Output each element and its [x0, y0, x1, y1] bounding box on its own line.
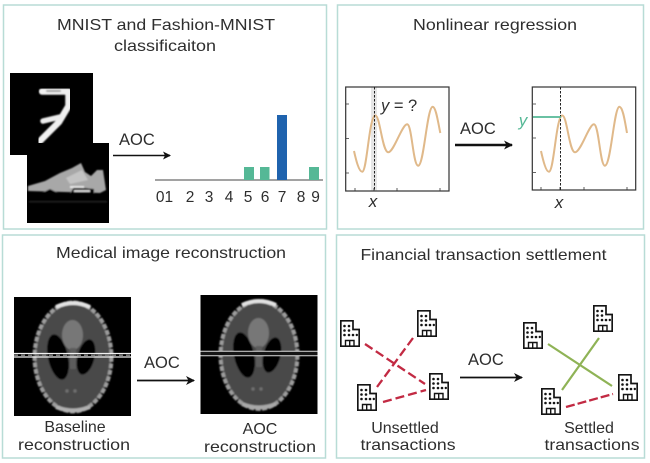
axis labels: digits: 5 [244, 189, 252, 206]
heading: financial transaction settlement: Financial transaction settlement [360, 247, 607, 264]
axis labels: digits: 01 [156, 189, 173, 206]
axis labels: digits: 3 [205, 189, 213, 206]
icon: building [418, 311, 436, 336]
image: baseline phantom [14, 297, 131, 416]
network: settled transactions [524, 306, 637, 414]
caption: settled transactions: Settled [564, 420, 614, 437]
caption: settled transactions: transactions [544, 437, 640, 454]
label: y: y [518, 111, 529, 130]
caption: AOC reconstruction: reconstruction [204, 439, 316, 456]
label: x: x [554, 193, 564, 212]
network: unsettled transactions [341, 311, 448, 410]
icon: building [542, 389, 560, 414]
panel: nonlinear regression [338, 5, 644, 229]
label: y = ?: y = ? [380, 97, 417, 115]
label: x: x [368, 192, 378, 211]
chart: query plot [346, 87, 449, 211]
axis labels: digits: 8 [297, 189, 305, 206]
caption: unsettled transactions: Unsettled [371, 420, 439, 437]
label: AOC: AOC [119, 131, 155, 149]
panel: medical image reconstruction [2, 235, 326, 458]
icon: building [594, 306, 612, 331]
axis labels: digits: 4 [225, 189, 234, 206]
image: AOC phantom [200, 295, 318, 414]
icon: building [430, 374, 448, 399]
axis labels: digits: 9 [311, 189, 320, 206]
bar: class 5 [244, 167, 254, 180]
prediction line [533, 116, 561, 118]
label: AOC: AOC [460, 120, 496, 138]
caption: baseline reconstruction: Baseline [44, 419, 106, 436]
panel: MNIST and Fashion-MNIST classification [4, 5, 326, 229]
bar: class 6 [260, 167, 270, 180]
arrow: reconstruction output [137, 380, 194, 382]
image: handwritten digit seven [10, 73, 93, 155]
heading: MNIST classification: MNIST and Fashion-MNIST [57, 17, 275, 34]
arrow: settlement output [460, 376, 522, 378]
icon: building [358, 385, 376, 410]
bar: class 7 [277, 115, 287, 180]
panel: financial transaction settlement [336, 235, 644, 458]
caption: unsettled transactions: transactions [360, 437, 456, 454]
caption: AOC reconstruction: AOC [243, 421, 277, 438]
bar: class 9 [309, 167, 319, 180]
heading: MNIST classification: classificaiton [114, 38, 216, 55]
axis labels: digits: 6 [261, 189, 269, 206]
icon: building [524, 323, 542, 348]
image: fashion sneaker [27, 143, 109, 223]
label: AOC: AOC [144, 354, 180, 372]
axis labels: digits: 2 [186, 189, 194, 206]
icon: building [619, 375, 637, 400]
axis labels: digits: 7 [278, 189, 286, 206]
chart: predicted plot [518, 87, 636, 212]
caption: baseline reconstruction: reconstruction [18, 437, 130, 454]
icon: building [341, 321, 359, 346]
heading: medical image reconstruction: Medical image reconstruction [56, 245, 286, 262]
heading: nonlinear regression: Nonlinear regression [413, 17, 577, 34]
bar chart: class probabilities [155, 115, 323, 206]
arrow: regression output [455, 144, 512, 146]
label: AOC: AOC [468, 351, 504, 369]
arrow: classifier output [113, 154, 170, 156]
